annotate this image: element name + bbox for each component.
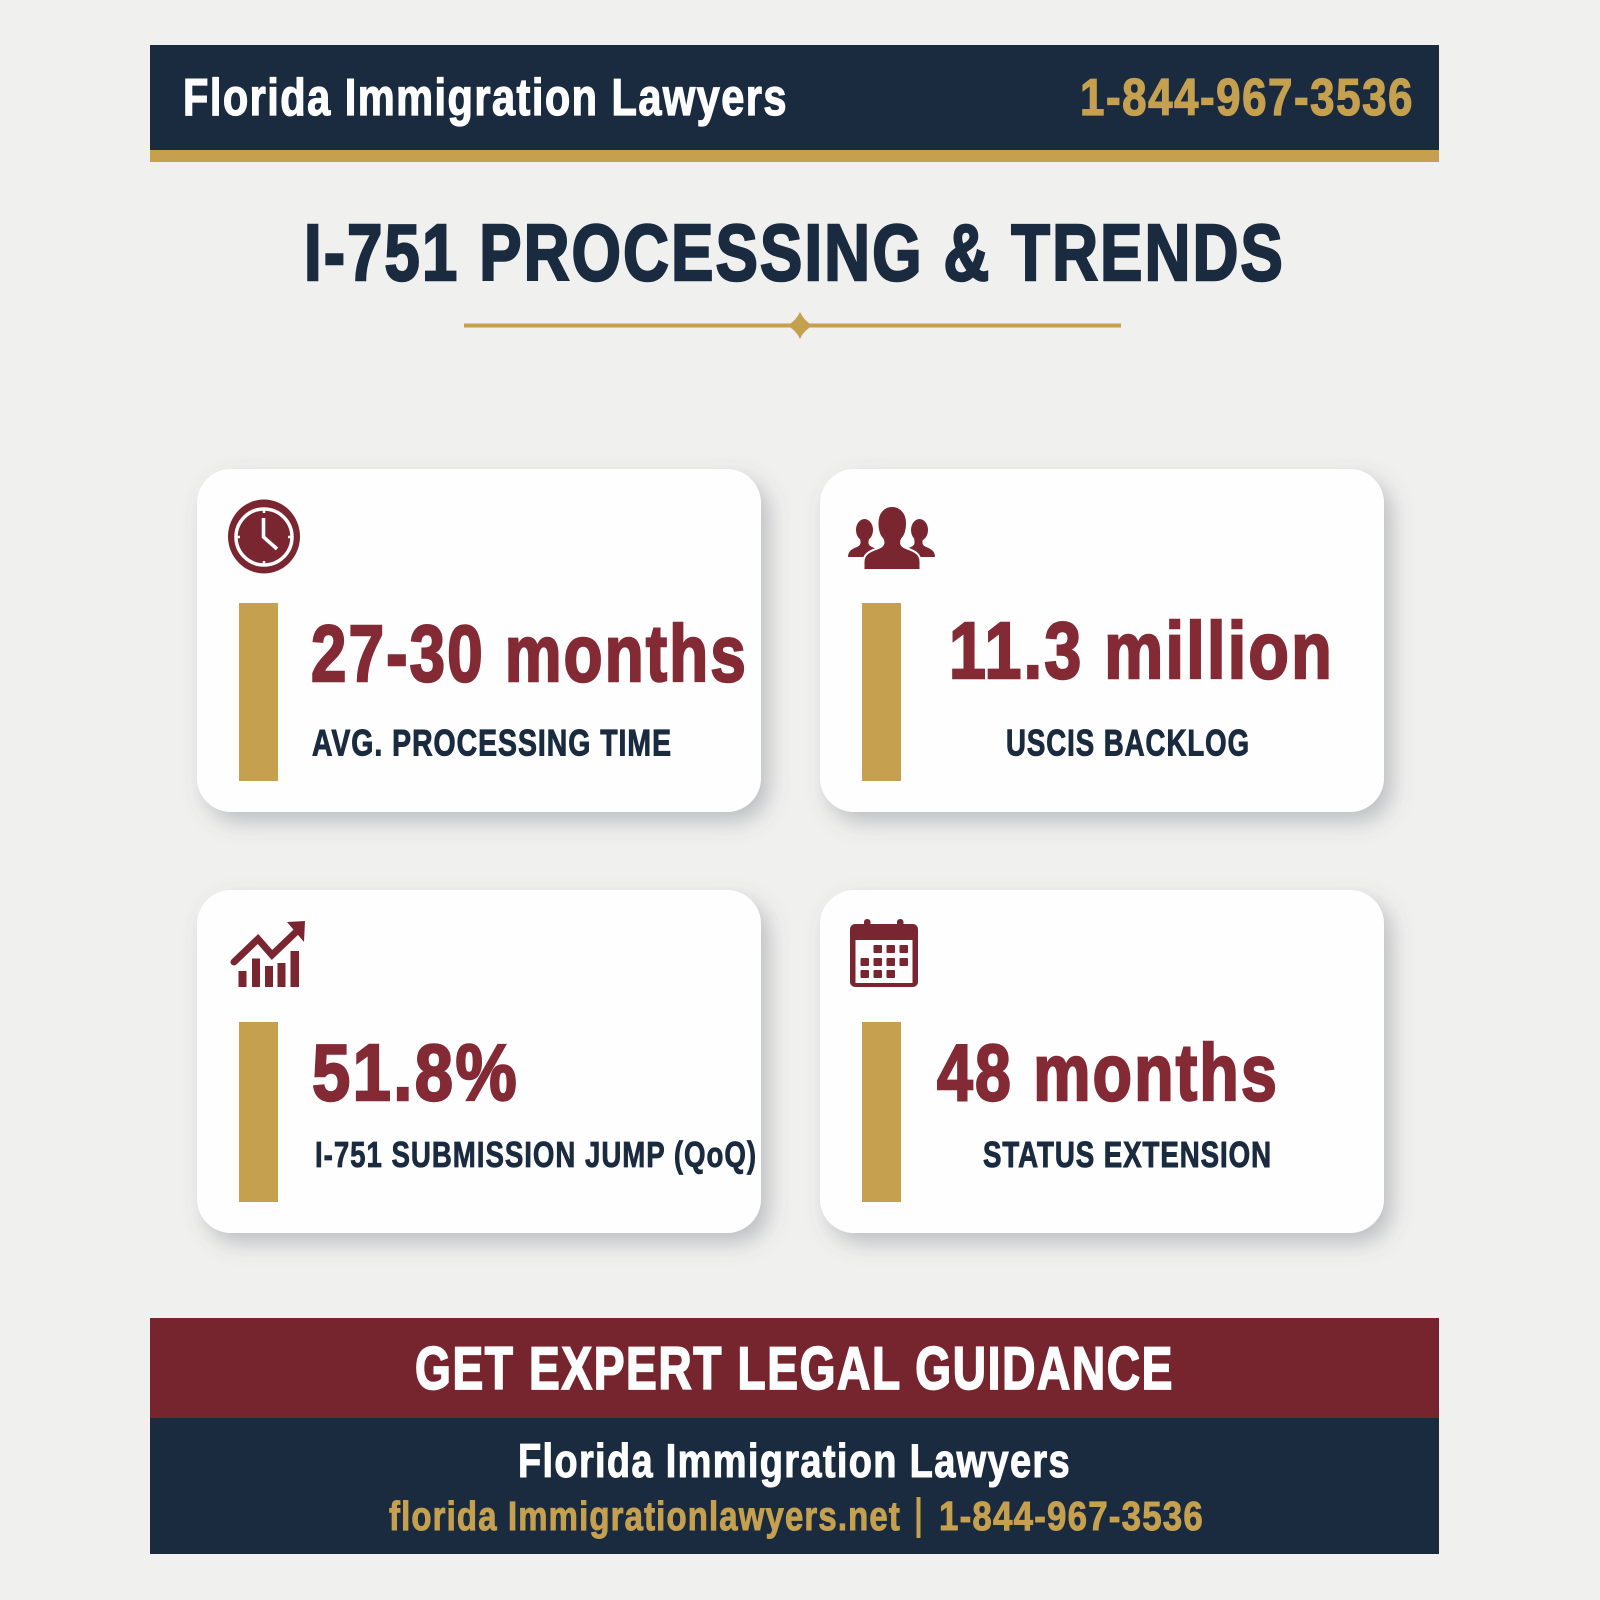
- panel: average processing time: [197, 469, 761, 812]
- icon: people: [848, 506, 935, 570]
- header firm name: Florida Immigration Lawyers: [183, 69, 788, 127]
- accent bar: [239, 1022, 278, 1202]
- value: 48 months: [937, 1028, 1279, 1117]
- call to action heading: GET EXPERT LEGAL GUIDANCE: [415, 1335, 1174, 1402]
- title: I-751 PROCESSING & TRENDS: [304, 208, 1285, 297]
- value: 11.3 million: [949, 606, 1334, 695]
- icon: clock: [228, 500, 300, 574]
- label: USCIS BACKLOG: [1006, 722, 1250, 764]
- label: STATUS EXTENSION: [983, 1134, 1272, 1175]
- panel: status extension: [820, 890, 1384, 1233]
- footer contact panel: [150, 1418, 1439, 1554]
- panel: i-751 submission jump: [197, 890, 761, 1233]
- title divider with diamond: [464, 312, 1121, 339]
- panel: uscis backlog: [820, 469, 1384, 812]
- footer website: florida Immigrationlawyers.net: [389, 1493, 901, 1539]
- value: 51.8%: [312, 1028, 519, 1117]
- footer phone: 1-844-967-3536: [939, 1493, 1204, 1539]
- label: AVG. PROCESSING TIME: [312, 722, 672, 764]
- header phone number: 1-844-967-3536: [1080, 69, 1414, 127]
- footer firm name: Florida Immigration Lawyers: [518, 1434, 1071, 1487]
- icon: calendar: [850, 919, 918, 987]
- accent bar: [862, 1022, 901, 1202]
- icon: rising chart: [234, 921, 305, 987]
- label: I-751 SUBMISSION JUMP (QoQ): [315, 1134, 757, 1175]
- footer separator: [916, 1497, 920, 1538]
- call to action banner: [150, 1318, 1439, 1418]
- value: 27-30 months: [311, 609, 748, 698]
- accent bar: [239, 603, 278, 781]
- header bar: [150, 45, 1439, 162]
- accent bar: [862, 603, 901, 781]
